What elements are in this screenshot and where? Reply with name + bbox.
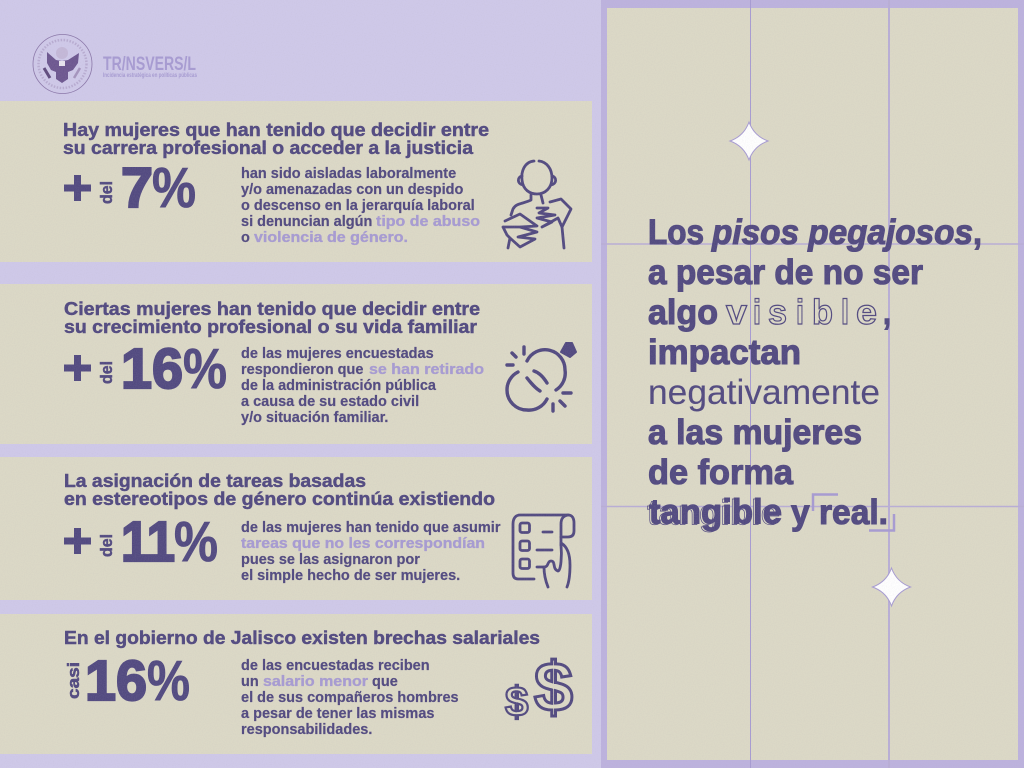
brackets — [813, 494, 894, 530]
main statement: impactan — [648, 333, 801, 372]
stat: casi 16%: casi — [64, 662, 83, 699]
panel: crecimiento o familia — [0, 284, 592, 444]
text block — [241, 658, 459, 738]
panel: brechas salariales — [0, 614, 592, 754]
text block: han sido aisladas laboralmente — [241, 166, 456, 182]
stat: + del 16%: del — [97, 361, 116, 384]
icon: star top — [730, 122, 768, 160]
text block: y/o amenazadas con un despido — [241, 182, 464, 198]
main statement: tangible — [647, 494, 780, 532]
stat: casi 16%: % — [147, 649, 190, 713]
icon: dollar signs: $ — [534, 648, 573, 726]
main statement: v — [726, 293, 748, 332]
icon: broken ring — [507, 343, 576, 411]
text block: que — [372, 674, 398, 690]
main statement: s — [768, 293, 787, 332]
stat: + del 11%: 11 — [121, 510, 175, 574]
heading: en estereotipos de género continúa existiendo — [64, 489, 495, 509]
text block: de las mujeres encuestadas — [241, 346, 434, 362]
main statement: a las mujeres — [648, 413, 862, 452]
icon: dollar signs: $ — [505, 678, 528, 725]
text block: tareas que no les correspondían — [241, 536, 485, 552]
main statement: negativamente — [648, 373, 880, 412]
stat: + del 7%: 7 — [121, 156, 153, 220]
heading — [64, 299, 480, 337]
stat: + del 16%: % — [183, 337, 227, 401]
stat: casi 16% — [64, 649, 190, 713]
heading: En el gobierno de Jalisco existen brechas salariales — [64, 628, 540, 648]
panel: estereotipos — [0, 457, 592, 600]
main statement: y real. — [791, 493, 888, 532]
icon: hands on body — [503, 161, 571, 248]
main statement: , — [973, 213, 982, 252]
heading — [64, 471, 495, 509]
text block: respondieron que — [241, 362, 363, 378]
main statement: i — [796, 293, 804, 332]
stat: + del 11%: del — [97, 534, 116, 557]
text block: el de sus compañeros hombres — [241, 690, 459, 706]
text block: el simple hecho de ser mujeres. — [241, 568, 460, 584]
heading: Hay mujeres que han tenido que decidir entre — [63, 120, 489, 140]
main statement: Los — [648, 213, 704, 252]
stat: + del 11% — [64, 510, 218, 574]
main statement: l — [841, 293, 849, 332]
text block — [241, 346, 484, 426]
tagline: Incidencia estratégica en políticas públicas — [103, 73, 197, 79]
stat: casi 16%: 16 — [85, 649, 147, 713]
text block: pues se las asignaron por — [241, 552, 420, 568]
main statement: pisos pegajosos — [711, 213, 973, 252]
panel: carrera o justicia — [0, 101, 592, 262]
main statement: b — [812, 293, 833, 332]
text block: responsabilidades. — [241, 722, 372, 738]
heading: La asignación de tareas basadas — [64, 471, 366, 491]
stat: + del 7% — [64, 156, 196, 220]
icon: star bottom — [872, 568, 910, 606]
main statement: e — [856, 293, 877, 332]
heading: su carrera profesional o acceder a la justicia — [63, 138, 474, 158]
main statement: de forma — [648, 453, 794, 492]
text block: y/o situación familiar. — [241, 410, 388, 426]
text block: de las mujeres han tenido que asumir — [241, 520, 501, 536]
logo — [33, 34, 197, 94]
text block: a pesar de tener las mismas — [241, 706, 434, 722]
text block: salario menor — [263, 674, 368, 690]
icon: checklist and hand — [513, 515, 574, 587]
stat: + del 7%: % — [152, 156, 196, 220]
text block: a causa de su estado civil — [241, 394, 419, 410]
main statement: , — [883, 293, 891, 332]
text block: tipo de abuso — [376, 214, 480, 230]
text block: de las encuestadas reciben — [241, 658, 430, 674]
text block: se han retirado — [369, 362, 484, 378]
panel: conclusion — [601, 0, 1024, 768]
stat: + del 11%: % — [174, 510, 218, 574]
heading: Ciertas mujeres han tenido que decidir entre — [64, 299, 480, 319]
text block: o — [241, 230, 250, 246]
main statement: i — [753, 293, 761, 332]
main statement: a pesar de no ser — [648, 253, 923, 292]
stat: + del 7%: del — [97, 181, 116, 204]
text block: o descenso en la jerarquía laboral — [241, 198, 475, 214]
text block: si denuncian algún — [241, 214, 372, 230]
main statement — [647, 213, 982, 532]
main statement: tangible — [649, 492, 782, 532]
stat: + del 16% — [64, 337, 227, 401]
text block: violencia de género. — [254, 230, 408, 246]
stat: + del 16%: 16 — [121, 337, 183, 401]
heading: su crecimiento profesional o su vida familiar — [64, 317, 477, 337]
text block: un — [241, 674, 259, 690]
text block — [241, 166, 480, 246]
text block — [241, 520, 501, 584]
main statement: algo — [648, 293, 718, 332]
heading — [63, 120, 489, 158]
icon: dollar signs — [505, 648, 573, 726]
text block: de la administración pública — [241, 378, 437, 394]
wordmark: TR/NSVERS/L — [103, 54, 196, 75]
icon: seal — [33, 34, 92, 94]
